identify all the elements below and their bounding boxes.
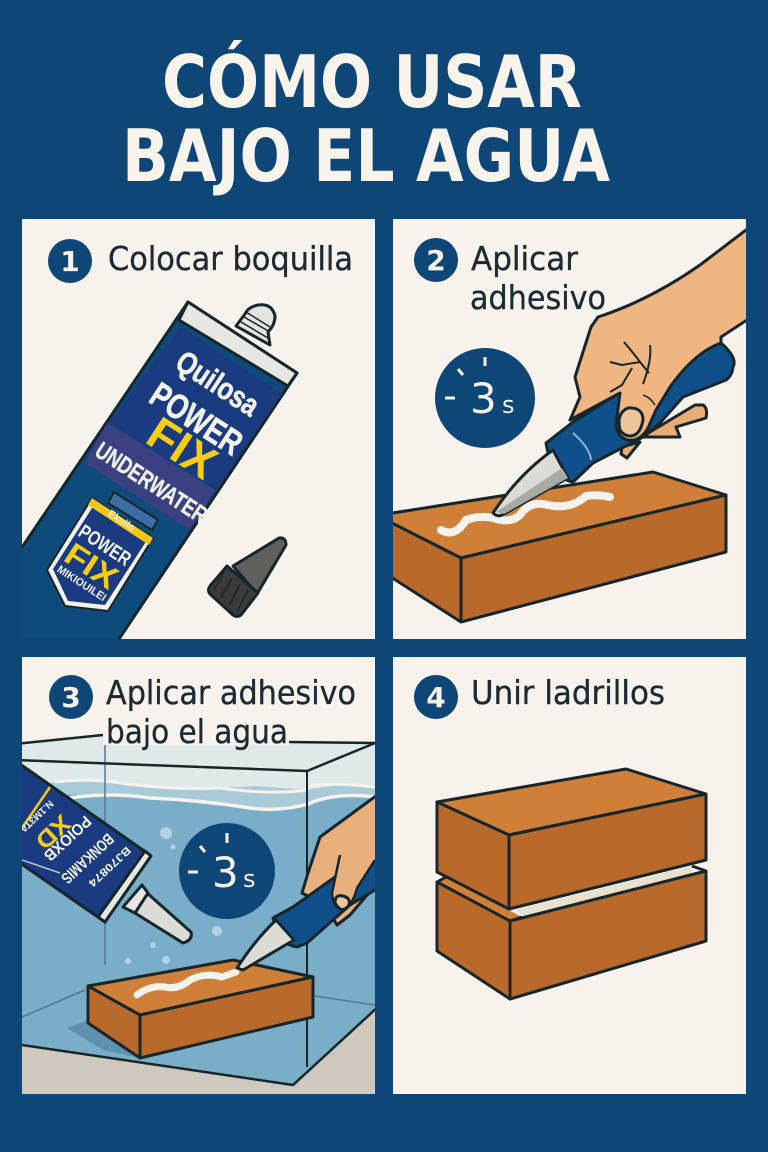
product badge on cartridge: Ekuilo <box>106 508 137 534</box>
step 2 heading <box>470 239 606 317</box>
panel: step 2 aplicar adhesivo <box>380 219 750 639</box>
icon: adhesive cartridge <box>10 302 297 645</box>
product badge on cartridge: MIKIOUILEI <box>55 564 108 604</box>
step 1 number badge: 1 <box>60 245 80 278</box>
icon: 3 second timer: s <box>243 865 256 893</box>
adhesive bead <box>441 495 610 532</box>
panel: step 3 aplicar adhesivo bajo el agua <box>10 657 380 1100</box>
step 4 number badge <box>414 675 458 719</box>
icon: 3 second timer <box>179 823 275 919</box>
brick <box>380 472 726 622</box>
top brick <box>437 769 706 909</box>
step 1 number badge <box>48 239 92 283</box>
icon: adhesive cartridge: Quilosa <box>170 344 266 423</box>
step 2 heading: Aplicar <box>471 239 578 278</box>
step 3 number badge <box>49 675 93 719</box>
panel: step 4 unir ladrillos <box>393 657 746 1094</box>
step 3 heading: Aplicar adhesivo <box>106 673 356 712</box>
brick in water <box>88 960 313 1058</box>
step 3 number badge: 3 <box>61 681 81 714</box>
title <box>122 40 610 198</box>
product badge on cartridge: POWER <box>74 521 135 571</box>
product badge on cartridge: FIX <box>58 535 125 597</box>
icon: hand holding applicator under water <box>237 793 380 970</box>
icon: 3 second timer: 3 <box>212 848 239 897</box>
icon: dark nozzle cap <box>208 538 286 616</box>
step 1 heading: Colocar boquilla <box>108 239 353 278</box>
step 3 heading <box>103 673 356 751</box>
tilted adhesive tube: XD <box>30 809 76 854</box>
step 3 heading: bajo el agua <box>106 712 288 751</box>
air bubbles <box>125 827 222 964</box>
aquarium <box>15 735 380 1100</box>
step 2 heading: adhesivo <box>470 278 606 317</box>
product badge on cartridge <box>47 492 158 611</box>
tilted adhesive tube: BJ70874 <box>85 844 133 889</box>
bottom brick <box>437 866 706 999</box>
icon: hand holding applicator <box>493 227 750 516</box>
title: CÓMO USAR <box>162 40 582 124</box>
tilted adhesive tube: BONKAMIS <box>57 830 117 886</box>
step 2 number badge <box>414 238 458 282</box>
step 4 number badge: 4 <box>426 681 446 714</box>
icon: adhesive cartridge: POWER <box>143 375 250 463</box>
title: BAJO EL AGUA <box>122 114 610 198</box>
tilted adhesive tube: N.1M3TA <box>17 798 55 834</box>
icon: 3 second timer: s <box>502 391 515 419</box>
icon: adhesive cartridge: UNDERWATER <box>90 437 212 529</box>
icon: 3 second timer <box>435 348 535 448</box>
icon: 3 second timer: 3 <box>470 374 497 423</box>
step 2 number badge: 2 <box>426 244 446 277</box>
step 4 heading: Unir ladrillos <box>471 673 665 712</box>
tilted adhesive tube <box>10 757 191 943</box>
icon: adhesive cartridge: FIX <box>138 406 227 489</box>
panel: step 1 colocar boquilla <box>10 219 375 645</box>
tilted adhesive tube: POIOXB <box>40 812 94 864</box>
